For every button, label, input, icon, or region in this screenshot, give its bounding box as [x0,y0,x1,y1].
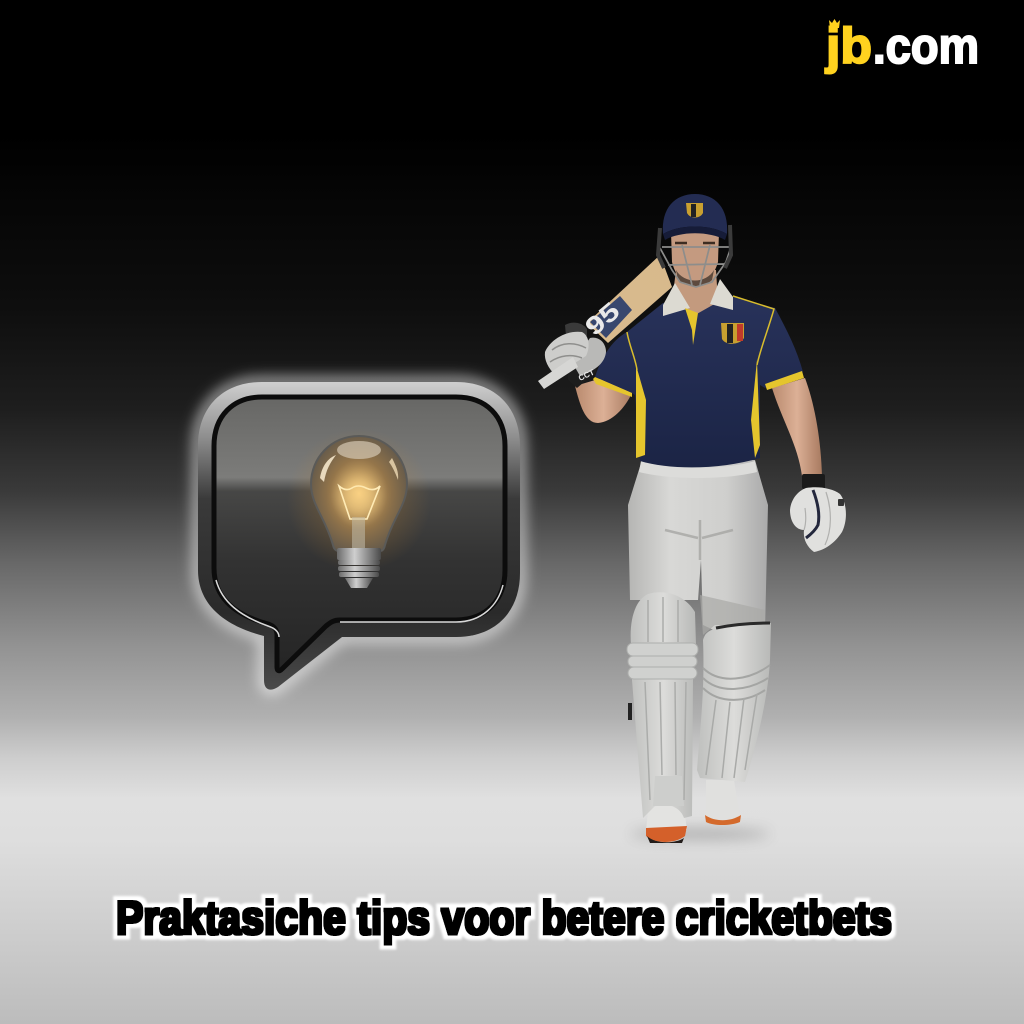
right glove [790,487,846,552]
bulb glass [311,436,407,551]
right leg pad [697,623,771,782]
logo: jb.com [825,18,979,74]
logo: jb.com: jb [825,18,872,74]
trousers [628,460,768,640]
ground shadow [630,829,770,839]
sleeve cuffs [593,371,804,397]
speech bubble with light bulb [198,382,520,690]
bulb screw base [337,548,381,588]
cricket bat [580,255,672,343]
face [671,232,719,286]
shirt [595,297,803,467]
placket [685,308,698,345]
collar [663,279,733,316]
left glove [538,323,606,389]
bubble inner highlight [216,580,503,637]
neck [672,270,718,315]
shirt crest [721,323,744,344]
right shoe [705,780,741,825]
bulb glow [287,428,431,572]
bat handle [538,357,578,389]
cricket bat: 95 [580,297,626,342]
helmet cage [660,245,731,287]
left glove: CCT [577,368,596,383]
helmet [663,194,727,234]
shirt yellow side panels [636,360,760,458]
title: Praktasiche tips voor betere cricketbets [116,891,892,944]
bubble metal frame [198,382,520,690]
shirt piping [627,296,774,370]
left shoe [646,804,687,843]
player right arm [772,378,822,476]
waistband [639,461,757,478]
left leg pad [627,592,698,818]
right wrist band [802,474,825,489]
logo: jb.com: .com [873,18,979,74]
bulb reflections [320,455,336,482]
helmet crest [686,203,703,218]
cricket player [538,194,846,843]
icon: crown [829,19,840,28]
bulb filament [339,486,380,519]
bubble inner panel [214,397,505,671]
player left arm [575,378,632,423]
